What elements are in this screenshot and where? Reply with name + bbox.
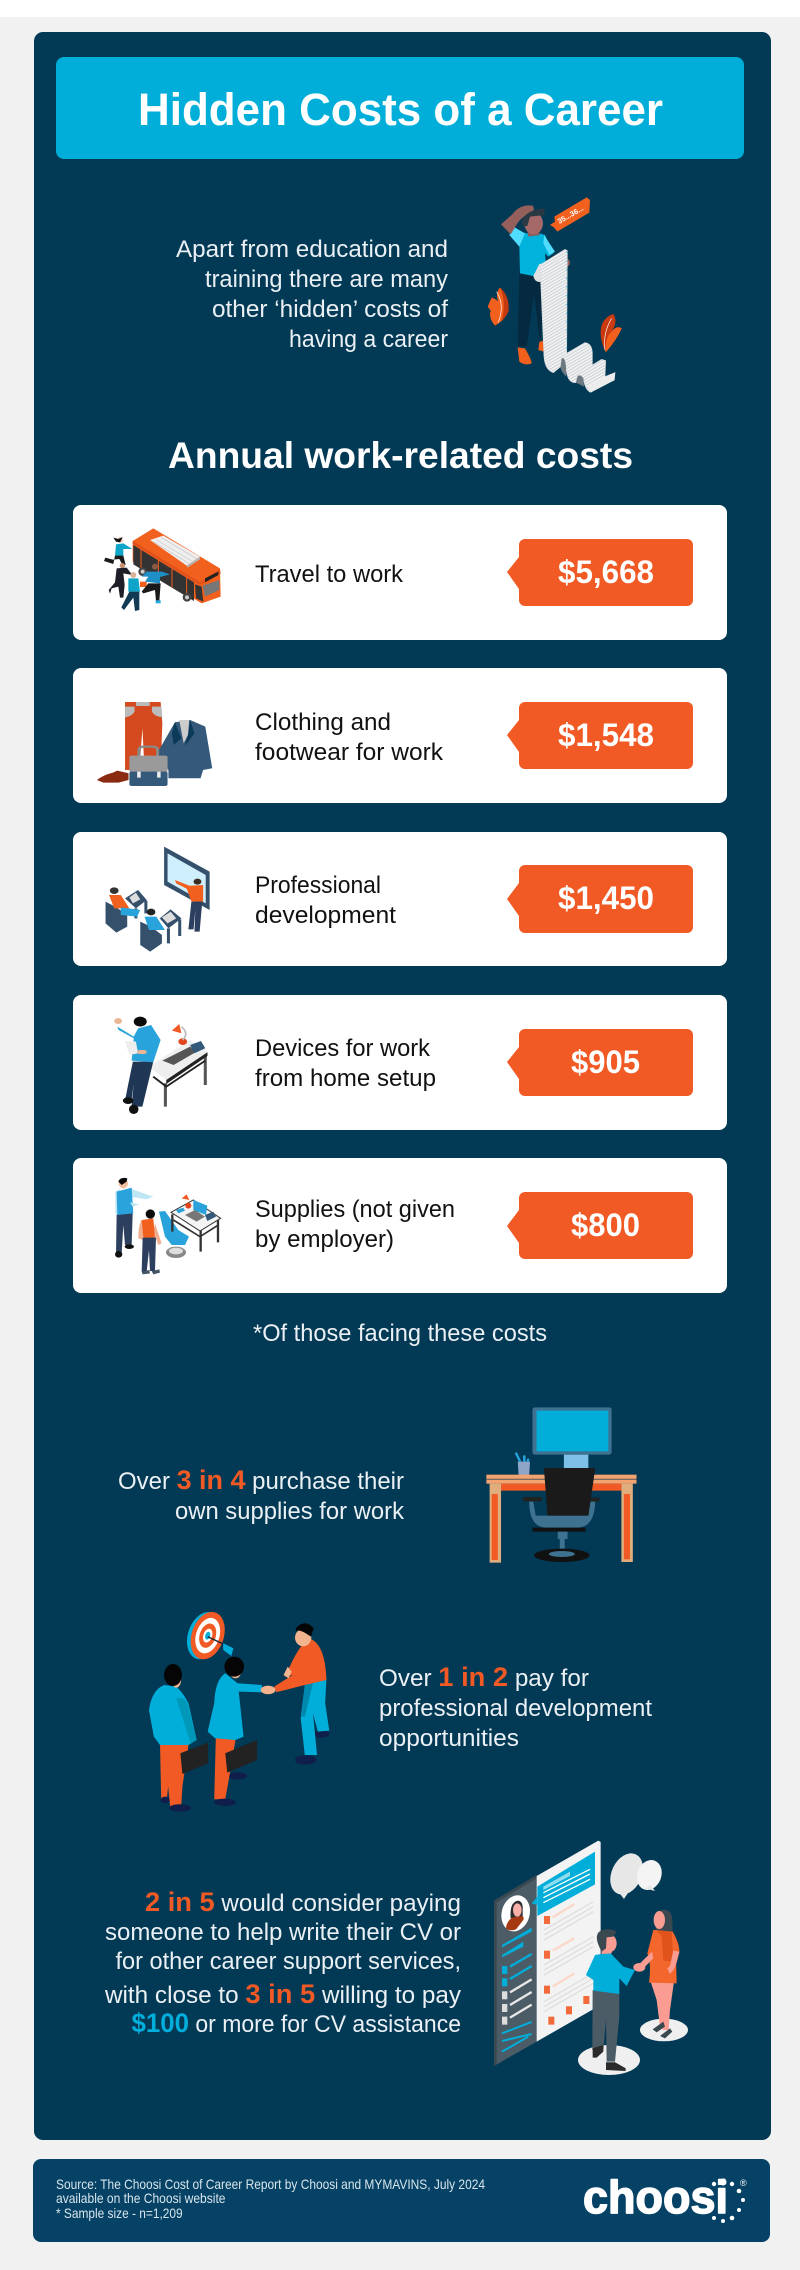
title: Hidden Costs of a Career — [138, 84, 663, 135]
panel: devices row — [73, 995, 727, 1130]
logo: choosi: choosi — [583, 2171, 728, 2223]
icon: man at home desk — [114, 1017, 207, 1114]
stat: 3 in 4: own supplies for work — [175, 1498, 405, 1525]
price tag — [507, 1029, 693, 1096]
stat: 2 in 5 and 3 in 5: 2 in 5 would consider paying — [145, 1887, 461, 1917]
intro text — [176, 236, 448, 353]
intro text: having a career — [289, 326, 448, 353]
source text: Source: The Choosi Cost of Career Report by Choosi and MYMAVINS, July 2024 — [56, 2176, 485, 2192]
price tag — [507, 539, 693, 606]
label — [255, 872, 396, 929]
label: development — [255, 902, 396, 929]
price tag — [507, 865, 693, 933]
source text: * Sample size - n=1,209 — [56, 2205, 183, 2221]
label — [255, 1196, 455, 1253]
label — [255, 709, 444, 766]
price tag: $905 — [571, 1044, 640, 1080]
icon: bus and commuters — [104, 528, 221, 611]
stat: 3 in 4 — [118, 1465, 405, 1525]
icon: CV and two people — [494, 1841, 688, 2075]
stat: 1 in 2: Over 1 in 2 pay for — [379, 1662, 589, 1692]
label: Supplies (not given — [255, 1196, 455, 1223]
label: Professional — [255, 872, 381, 899]
title banner — [56, 57, 744, 159]
stat: 2 in 5 and 3 in 5: $100 or more for CV assistance — [132, 2008, 461, 2038]
label — [255, 1035, 436, 1092]
icon: handshake and target — [149, 1609, 329, 1812]
footnote: *Of those facing these costs — [253, 1320, 547, 1347]
price tag — [507, 1192, 693, 1259]
icon: people at office desk — [115, 1178, 221, 1274]
heading: annual costs: Annual work-related costs — [168, 435, 633, 476]
intro text: training there are many — [205, 266, 448, 293]
icon: man with long receipt: 35...36... — [556, 204, 585, 226]
icon: clothing and briefcase — [97, 702, 212, 786]
logo: choosi: ® — [740, 2178, 747, 2188]
icon: computer desk — [486, 1407, 637, 1563]
stat: 1 in 2: opportunities — [379, 1725, 519, 1752]
source text: available on the Choosi website — [56, 2190, 226, 2206]
stat: 2 in 5 and 3 in 5: for other career support services, — [116, 1948, 461, 1975]
panel: travel row — [73, 505, 727, 640]
label: Clothing and — [255, 709, 391, 736]
price tag: $800 — [571, 1207, 640, 1243]
stat: 2 in 5 and 3 in 5: with close to 3 in 5 willing to pay — [104, 1979, 461, 2009]
price tag — [507, 702, 693, 769]
label: by employer) — [255, 1226, 394, 1253]
panel: footer — [33, 2159, 770, 2242]
stat: 1 in 2: professional development — [379, 1695, 652, 1722]
icon: classroom — [106, 847, 210, 952]
stat: 3 in 4: Over 3 in 4 purchase their — [118, 1465, 404, 1495]
price tag: $5,668 — [558, 554, 654, 590]
intro text: Apart from education and — [176, 236, 448, 263]
panel: professional development row — [73, 832, 727, 966]
stat: 2 in 5 and 3 in 5: someone to help write their CV or — [105, 1919, 461, 1946]
label: footwear for work — [255, 739, 444, 766]
intro text: other ‘hidden’ costs of — [212, 296, 448, 323]
stat: 1 in 2 — [379, 1662, 652, 1752]
stat: 2 in 5 and 3 in 5 — [104, 1887, 461, 2038]
label: Travel to work — [255, 561, 404, 588]
source text — [56, 2176, 485, 2221]
label: from home setup — [255, 1065, 436, 1092]
label: Devices for work — [255, 1035, 431, 1062]
price tag: $1,450 — [558, 880, 654, 916]
icon: man with long receipt — [488, 197, 622, 392]
price tag: $1,548 — [558, 717, 654, 753]
panel: clothing row — [73, 668, 727, 803]
panel: supplies row — [73, 1158, 727, 1293]
